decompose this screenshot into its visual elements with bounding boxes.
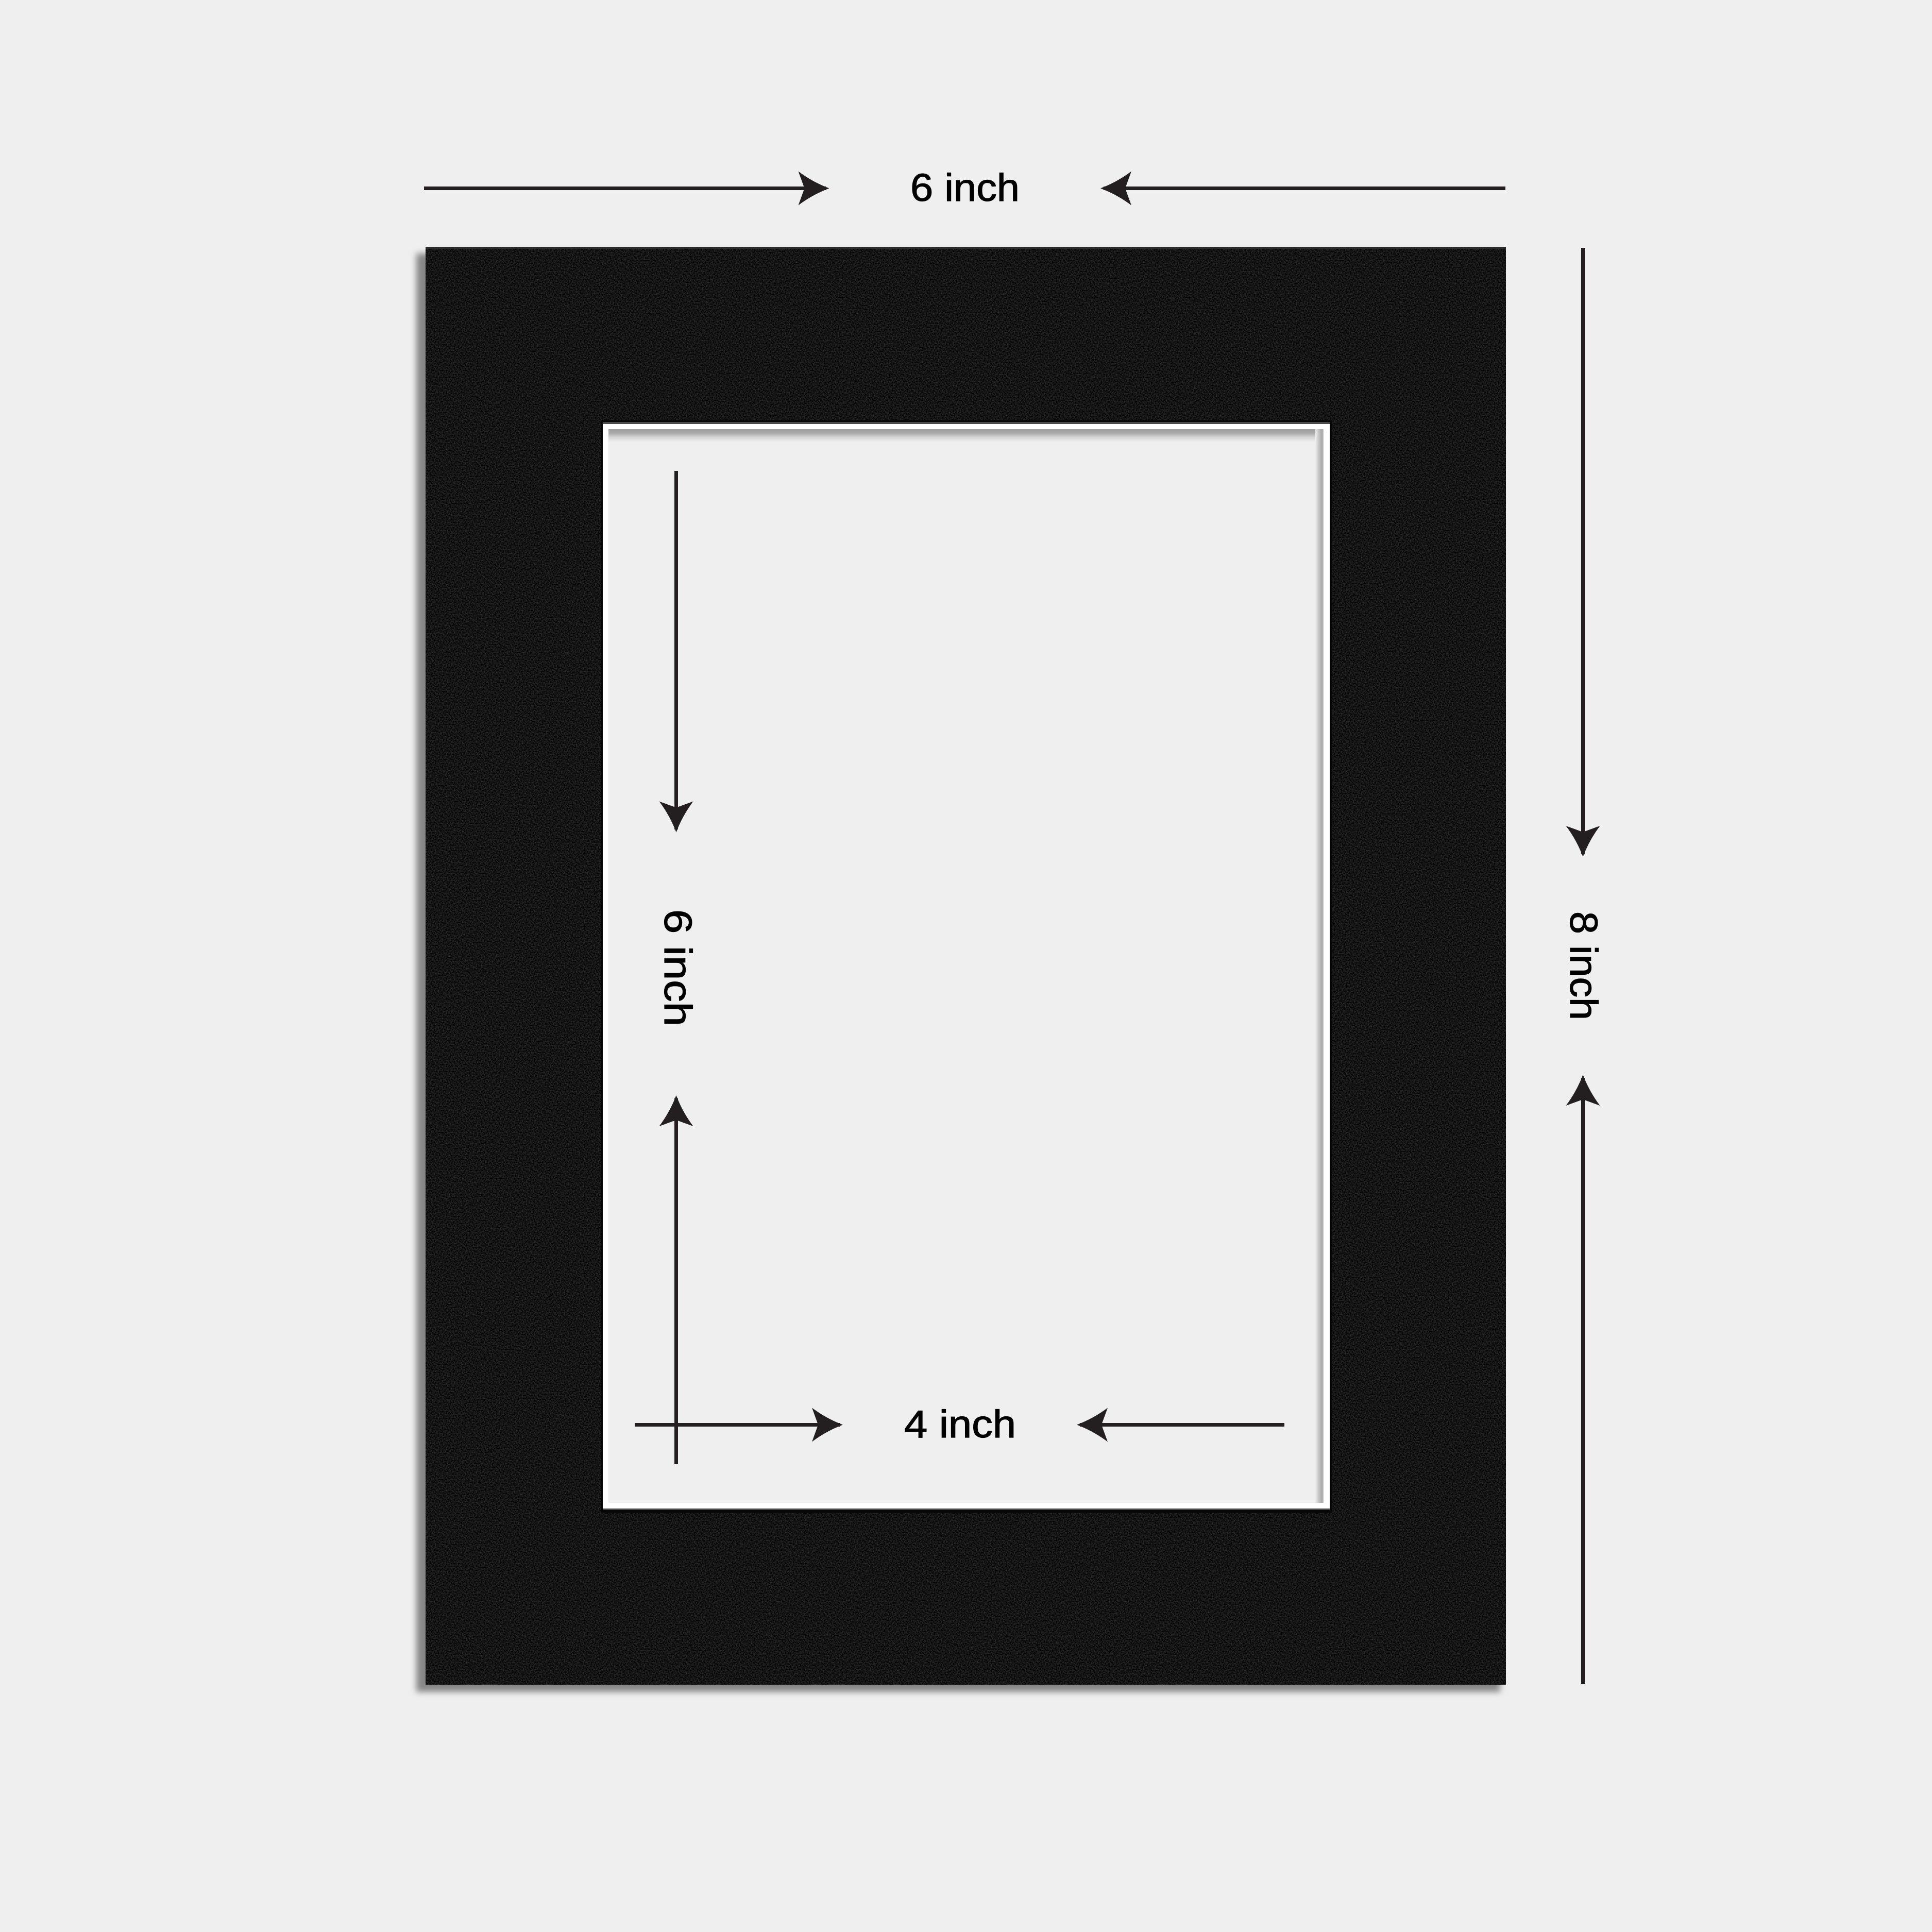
mat board frame	[416, 247, 1506, 1692]
top width label: 6 inch	[910, 166, 1020, 209]
inner width arrow, left	[635, 1408, 843, 1442]
inner height arrow, bottom	[659, 1095, 693, 1464]
mat drop shadow	[416, 253, 1500, 1692]
top width arrow, left	[424, 171, 829, 205]
black mat surface	[426, 247, 1506, 1685]
outer height arrow, bottom	[1566, 1075, 1600, 1684]
inner height arrow, top	[659, 471, 693, 833]
top width arrow, right	[1100, 171, 1505, 205]
inner height label: 6 inch	[656, 909, 700, 1026]
inner width arrow, right	[1077, 1408, 1284, 1442]
outer height arrow, top	[1566, 248, 1600, 857]
photo window opening	[601, 420, 1332, 1513]
outer height label: 8 inch	[1562, 911, 1605, 1020]
inner width label: 4 inch	[904, 1402, 1016, 1446]
